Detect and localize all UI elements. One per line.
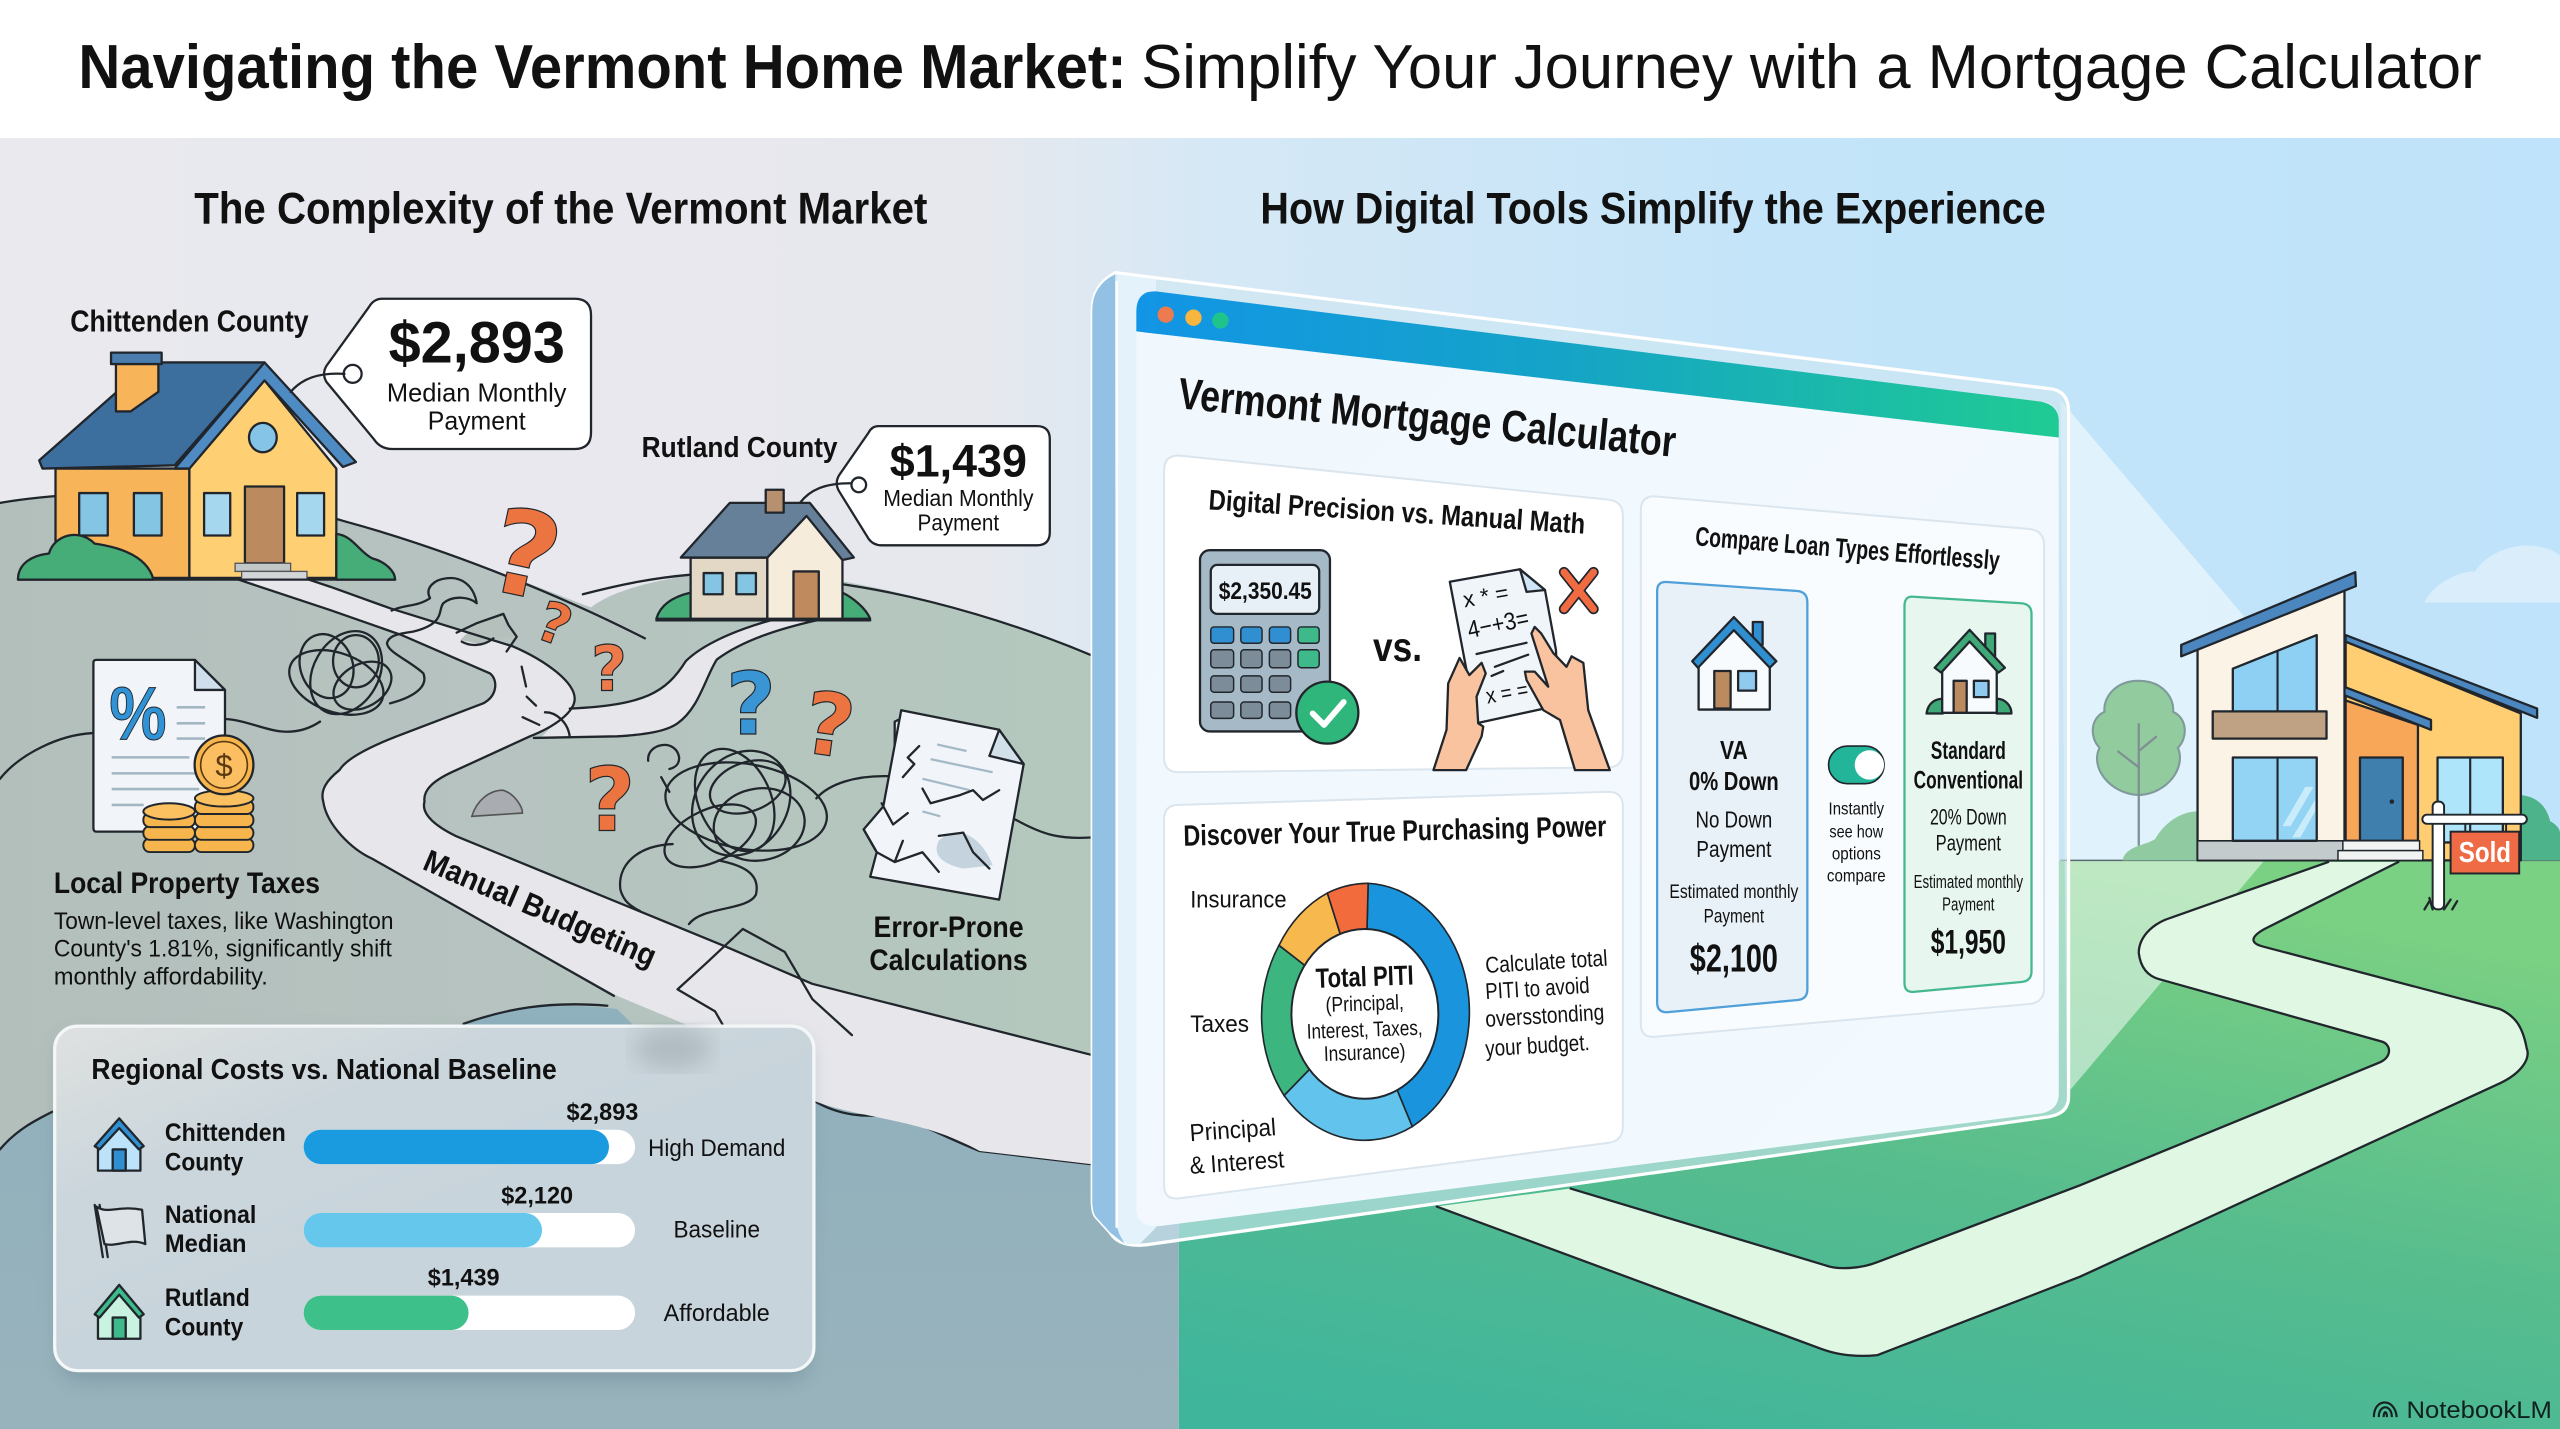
question marks: ? <box>584 748 635 851</box>
donut chart: PITI: Insurance) <box>1323 1040 1406 1066</box>
text block: local property taxes <box>54 867 393 990</box>
icon: hands and paper <box>1433 569 1610 770</box>
price tag: Chittenden: Payment <box>428 405 526 435</box>
panel: vermont mortgage calculator <box>1092 273 2069 1245</box>
price tag: Rutland: $1,439 <box>890 436 1027 487</box>
text block: local property taxes: Town-level taxes, like Washington <box>54 909 393 935</box>
price tag: Rutland: Median Monthly <box>883 485 1034 511</box>
donut chart: PITI: (Principal, <box>1325 991 1404 1017</box>
winding road <box>238 580 1091 1164</box>
page title: Simplify Your Journey with a Mortgage Calculator <box>1141 33 2482 102</box>
price tag: Rutland: Payment <box>918 510 1000 536</box>
row: Chittenden County: $2,893 <box>567 1100 638 1126</box>
option: VA loan: Payment <box>1696 836 1772 862</box>
panel: regional costs vs national baseline <box>55 1026 814 1381</box>
option: VA loan: Estimated monthly <box>1669 881 1799 903</box>
question marks: ? <box>528 589 580 661</box>
price tag: Chittenden: Median Monthly <box>387 378 567 408</box>
row: National Median: $2,120 <box>501 1183 573 1209</box>
donut labels: Principal <box>1189 1114 1277 1147</box>
toggle and note: options <box>1832 844 1881 864</box>
right wing <box>2346 642 2521 860</box>
option: standard conventional: $1,950 <box>1931 923 2006 961</box>
road label: manual budgeting: Manual Budgeting <box>418 843 662 974</box>
toggle and note: compare <box>1827 866 1886 886</box>
price tag: Rutland <box>800 426 1050 545</box>
question marks: ? <box>797 673 861 779</box>
option: standard conventional: Standard <box>1931 737 2006 765</box>
winding driveway <box>1437 862 2528 1356</box>
driveway outline <box>1437 862 2528 1356</box>
tree <box>2093 681 2185 846</box>
notebooklm watermark: NotebookLM <box>2407 1398 2552 1424</box>
option: standard conventional: Estimated monthly <box>1914 871 2023 892</box>
light cone from calculator to house <box>2060 400 2264 1094</box>
option: VA loan <box>1657 582 1807 1012</box>
row: Rutland County: County <box>165 1313 243 1341</box>
price tag: Chittenden: $2,893 <box>389 310 565 375</box>
row: Chittenden County: Chittenden <box>165 1119 286 1147</box>
row: Rutland County: Affordable <box>664 1301 770 1327</box>
screen <box>1136 295 2059 1226</box>
row: Rutland County <box>95 1266 770 1341</box>
donut chart: PITI: Interest, Taxes, <box>1306 1017 1423 1044</box>
illustration: Chittenden house <box>18 353 395 580</box>
option: standard conventional: Payment <box>1936 831 2001 856</box>
donut chart: PITI <box>1262 883 1469 1140</box>
text block: local property taxes: monthly affordability. <box>54 964 268 990</box>
scribble tangle: upper <box>280 618 400 727</box>
text block: error-prone calculations <box>869 911 1028 977</box>
option: VA loan: 0% Down <box>1689 766 1779 796</box>
card: digital precision vs manual math <box>1164 456 1623 772</box>
card: discover purchasing power <box>1164 792 1623 1199</box>
card heading: Discover Your True Purchasing Power <box>1183 810 1607 853</box>
option: standard conventional <box>1904 597 2032 992</box>
sold sign: Sold <box>2459 837 2511 869</box>
icon: house with bushes <box>1927 630 2011 713</box>
icon: calculator: $2,350.45 <box>1219 579 1312 605</box>
option: VA loan: No Down <box>1696 807 1772 833</box>
option: VA loan: Payment <box>1704 905 1765 927</box>
cream block <box>2198 589 2344 860</box>
donut labels: & Interest <box>1189 1146 1285 1180</box>
scribble tangle: lower <box>620 732 834 924</box>
icon: hands and paper: x * = <box>1461 580 1510 612</box>
row: Rutland County: $1,439 <box>428 1266 500 1292</box>
page title <box>78 33 2482 102</box>
illustration: modern home with sold sign <box>2093 572 2560 860</box>
explanatory note: PITI to avoid <box>1484 972 1590 1004</box>
donut labels: Taxes <box>1190 1011 1249 1038</box>
cloud <box>2424 546 2560 602</box>
row: Chittenden County <box>95 1100 785 1177</box>
row: Chittenden County: High Demand <box>648 1136 785 1162</box>
question marks: ? <box>591 633 627 706</box>
option: VA loan: $2,100 <box>1690 937 1778 980</box>
illustration: property tax document and coins: $ <box>215 748 233 783</box>
sold sign <box>2422 802 2527 909</box>
text block: local property taxes: Local Property Taxes <box>54 867 320 900</box>
water <box>0 1006 1179 1429</box>
door and window <box>2360 758 2403 841</box>
toggle and note: see how <box>1829 822 1883 842</box>
row: National Median: Baseline <box>673 1218 760 1244</box>
left edge <box>1092 274 1125 1244</box>
calculator title: Vermont Mortgage Calculator <box>1176 369 1678 467</box>
row: National Median: Median <box>165 1230 247 1258</box>
row: Chittenden County: County <box>165 1149 243 1177</box>
question marks <box>477 481 861 851</box>
explanatory note: your budget. <box>1484 1029 1590 1061</box>
explanatory note: Calculate total <box>1484 945 1608 978</box>
toggle and note: Instantly <box>1829 799 1884 819</box>
question marks: ? <box>726 655 776 755</box>
label: Chittenden County: Chittenden County <box>70 305 309 338</box>
illustration: Rutland house <box>656 490 870 620</box>
title bar <box>1136 291 2059 438</box>
hills <box>0 493 1100 1184</box>
question marks: ? <box>477 481 573 629</box>
left landscape <box>0 493 1179 1429</box>
inner glass strip <box>1117 274 1156 1244</box>
option: standard conventional: Payment <box>1942 893 1995 914</box>
option: standard conventional: Conventional <box>1914 767 2023 795</box>
card heading: Compare Loan Types Effortlessly <box>1694 521 2001 576</box>
vs label: vs. <box>1373 624 1422 670</box>
icon: hands and paper: 4−+3= <box>1465 605 1531 644</box>
horizon line <box>2060 859 2560 861</box>
glass frame <box>1092 273 2069 1245</box>
option: standard conventional: 20% Down <box>1930 804 2007 829</box>
donut labels: Insurance <box>1190 887 1287 914</box>
rock <box>472 790 522 816</box>
section heading: complexity: The Complexity of the Vermont Market <box>194 185 928 234</box>
right lawn <box>1179 860 2560 1429</box>
panel heading: Regional Costs vs. National Baseline <box>91 1054 557 1086</box>
toggle and note <box>1827 746 1886 886</box>
donut labels <box>1189 887 1287 1180</box>
explanatory note: oversstonding <box>1484 999 1605 1032</box>
row: National Median <box>95 1183 760 1258</box>
label: Rutland County: Rutland County <box>642 432 838 464</box>
card: compare loan types <box>1641 496 2044 1037</box>
text block: local property taxes: County's 1.81%, significantly shift <box>54 937 392 963</box>
header band <box>0 0 2560 138</box>
section heading: digital tools: How Digital Tools Simplify the Experience <box>1260 185 2046 234</box>
tail lines <box>0 719 1091 838</box>
illustration: property tax document and coins: % <box>109 672 167 756</box>
text block: error-prone calculations: Calculations <box>869 944 1028 977</box>
page title: Navigating the Vermont Home Market: <box>78 33 1127 102</box>
card heading: Digital Precision vs. Manual Math <box>1208 484 1586 541</box>
row: National Median: National <box>165 1201 256 1229</box>
donut chart: PITI: Total PITI <box>1315 959 1414 994</box>
road cracks and rocks <box>387 578 852 1035</box>
text block: error-prone calculations: Error-Prone <box>873 911 1024 944</box>
icon: house <box>1692 617 1776 710</box>
icon: calculator <box>1200 550 1358 744</box>
option: VA loan: VA <box>1720 735 1748 765</box>
illustration: property tax document and coins <box>93 660 253 852</box>
explanatory note <box>1484 945 1608 1061</box>
price tag: Chittenden <box>291 299 591 449</box>
icon: hands and paper: x = = <box>1484 677 1530 709</box>
illustration: crumpled document <box>864 710 1024 900</box>
row: Rutland County: Rutland <box>165 1284 250 1312</box>
